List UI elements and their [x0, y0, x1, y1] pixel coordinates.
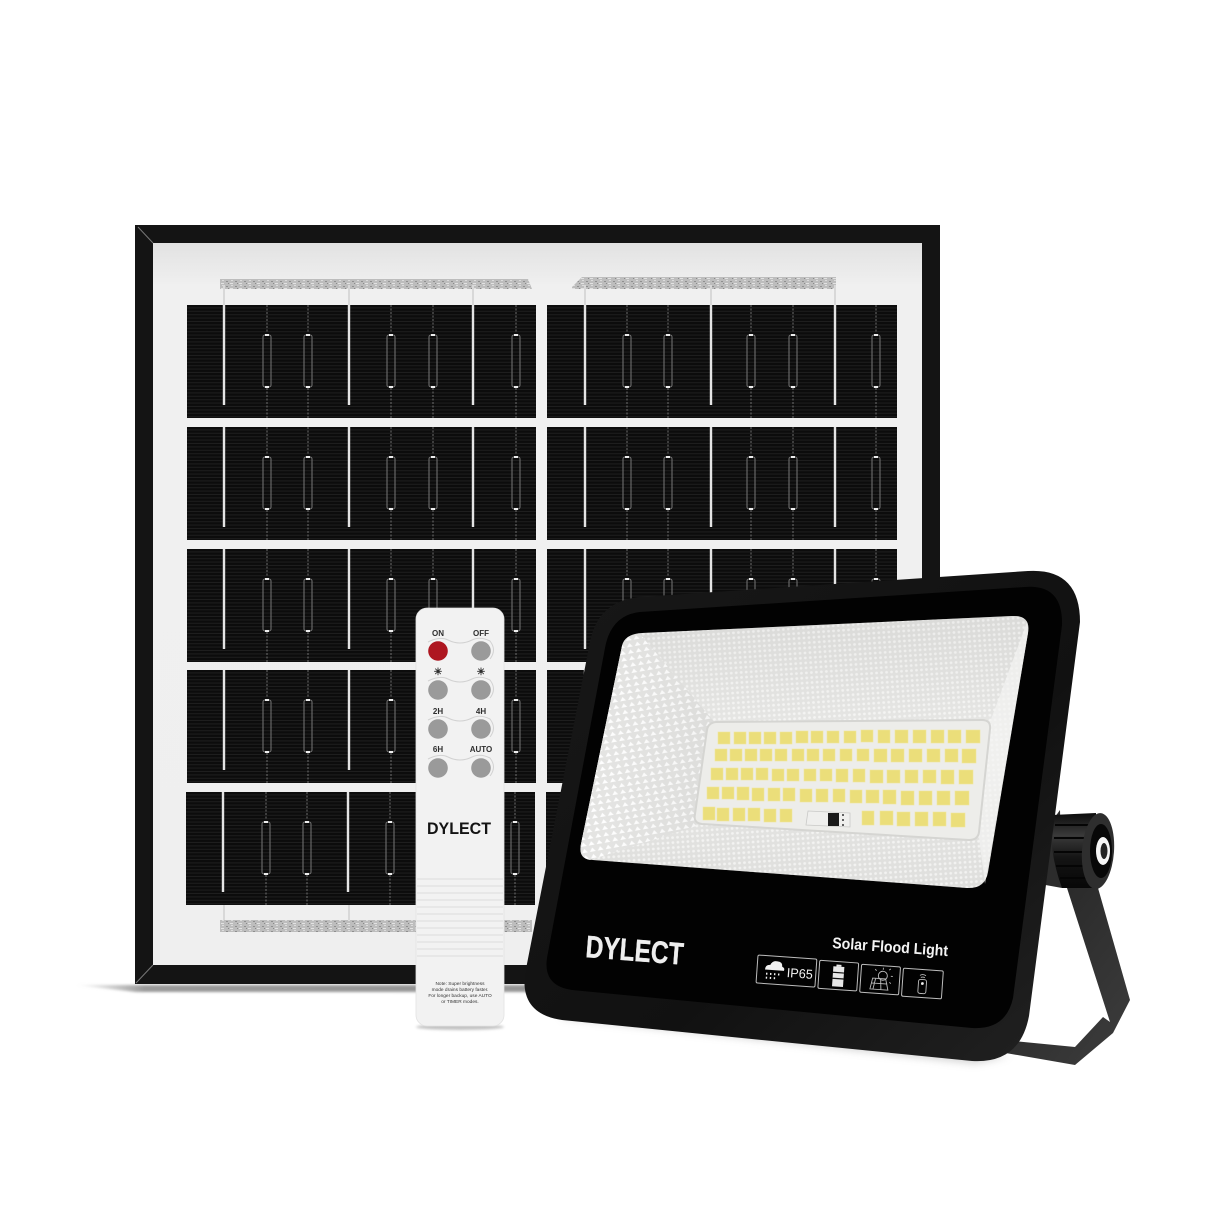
button: auto — [471, 758, 491, 778]
button: on — [428, 641, 448, 661]
solar cell row 1 — [187, 305, 897, 418]
remote body — [416, 608, 504, 1026]
flood light body — [524, 571, 1080, 1061]
feature icons row — [756, 955, 944, 999]
button labels: ☀ — [434, 667, 443, 678]
button: brightness up — [471, 680, 491, 700]
flood light mounting bracket — [1000, 810, 1130, 1065]
solar panel — [135, 225, 940, 984]
reflector left facet — [580, 634, 716, 860]
brand logo on flood light: DYLECT — [584, 929, 685, 972]
button labels: OFF — [473, 629, 489, 638]
button: off — [471, 641, 491, 661]
icon: IP65 weatherproof: IP65 — [786, 965, 813, 982]
top connector strips — [220, 277, 836, 305]
LED board — [695, 720, 990, 840]
button: 2H — [428, 719, 448, 739]
remote note: For longer backup, use AUTO — [428, 993, 492, 999]
panel backing sheet — [153, 243, 922, 965]
LED chips — [703, 730, 980, 827]
icon: remote control — [901, 968, 943, 999]
solar cell row 2 — [187, 427, 897, 540]
grip ribs — [417, 879, 503, 956]
frame mitre highlights — [136, 227, 153, 983]
mounting plate — [1040, 810, 1062, 888]
button labels: ON — [432, 629, 444, 638]
button labels — [432, 629, 492, 754]
solar cell row 3 — [187, 549, 897, 662]
remote shadow — [416, 1024, 504, 1030]
button labels: 2H — [433, 707, 443, 716]
icon: IP65 weatherproof — [756, 955, 817, 987]
button: brightness down — [428, 680, 448, 700]
product name: Solar Flood Light — [832, 935, 949, 960]
button: 4H — [471, 719, 491, 739]
button: 6H — [428, 758, 448, 778]
remote logo: DYLECT — [427, 819, 492, 838]
black front face — [547, 587, 1062, 1028]
icon: solar panel and sun — [860, 964, 901, 995]
remote note: mode drains battery faster. — [432, 987, 488, 993]
icon: battery — [818, 960, 859, 991]
reflector right facet — [979, 622, 1028, 884]
remote note: or TIMER modes. — [441, 999, 479, 1005]
solar cell row 5 — [186, 792, 896, 905]
bottom connector strips — [220, 905, 616, 932]
driver chip — [806, 811, 850, 827]
remote note — [428, 981, 492, 1005]
solar panel shadow — [75, 985, 940, 992]
knob — [1051, 812, 1117, 890]
solar cell row 4 — [187, 670, 897, 783]
remote control — [416, 608, 504, 1026]
button labels: 6H — [433, 745, 443, 754]
button surround lines — [428, 638, 494, 776]
flood light shadow — [560, 1010, 1010, 1064]
button labels: 4H — [476, 707, 486, 716]
button labels: ☀ — [477, 667, 486, 678]
button labels: AUTO — [470, 745, 492, 754]
remote note: Note: Super brightness — [435, 981, 485, 987]
panel frame — [135, 225, 940, 984]
reflector — [580, 616, 1028, 888]
